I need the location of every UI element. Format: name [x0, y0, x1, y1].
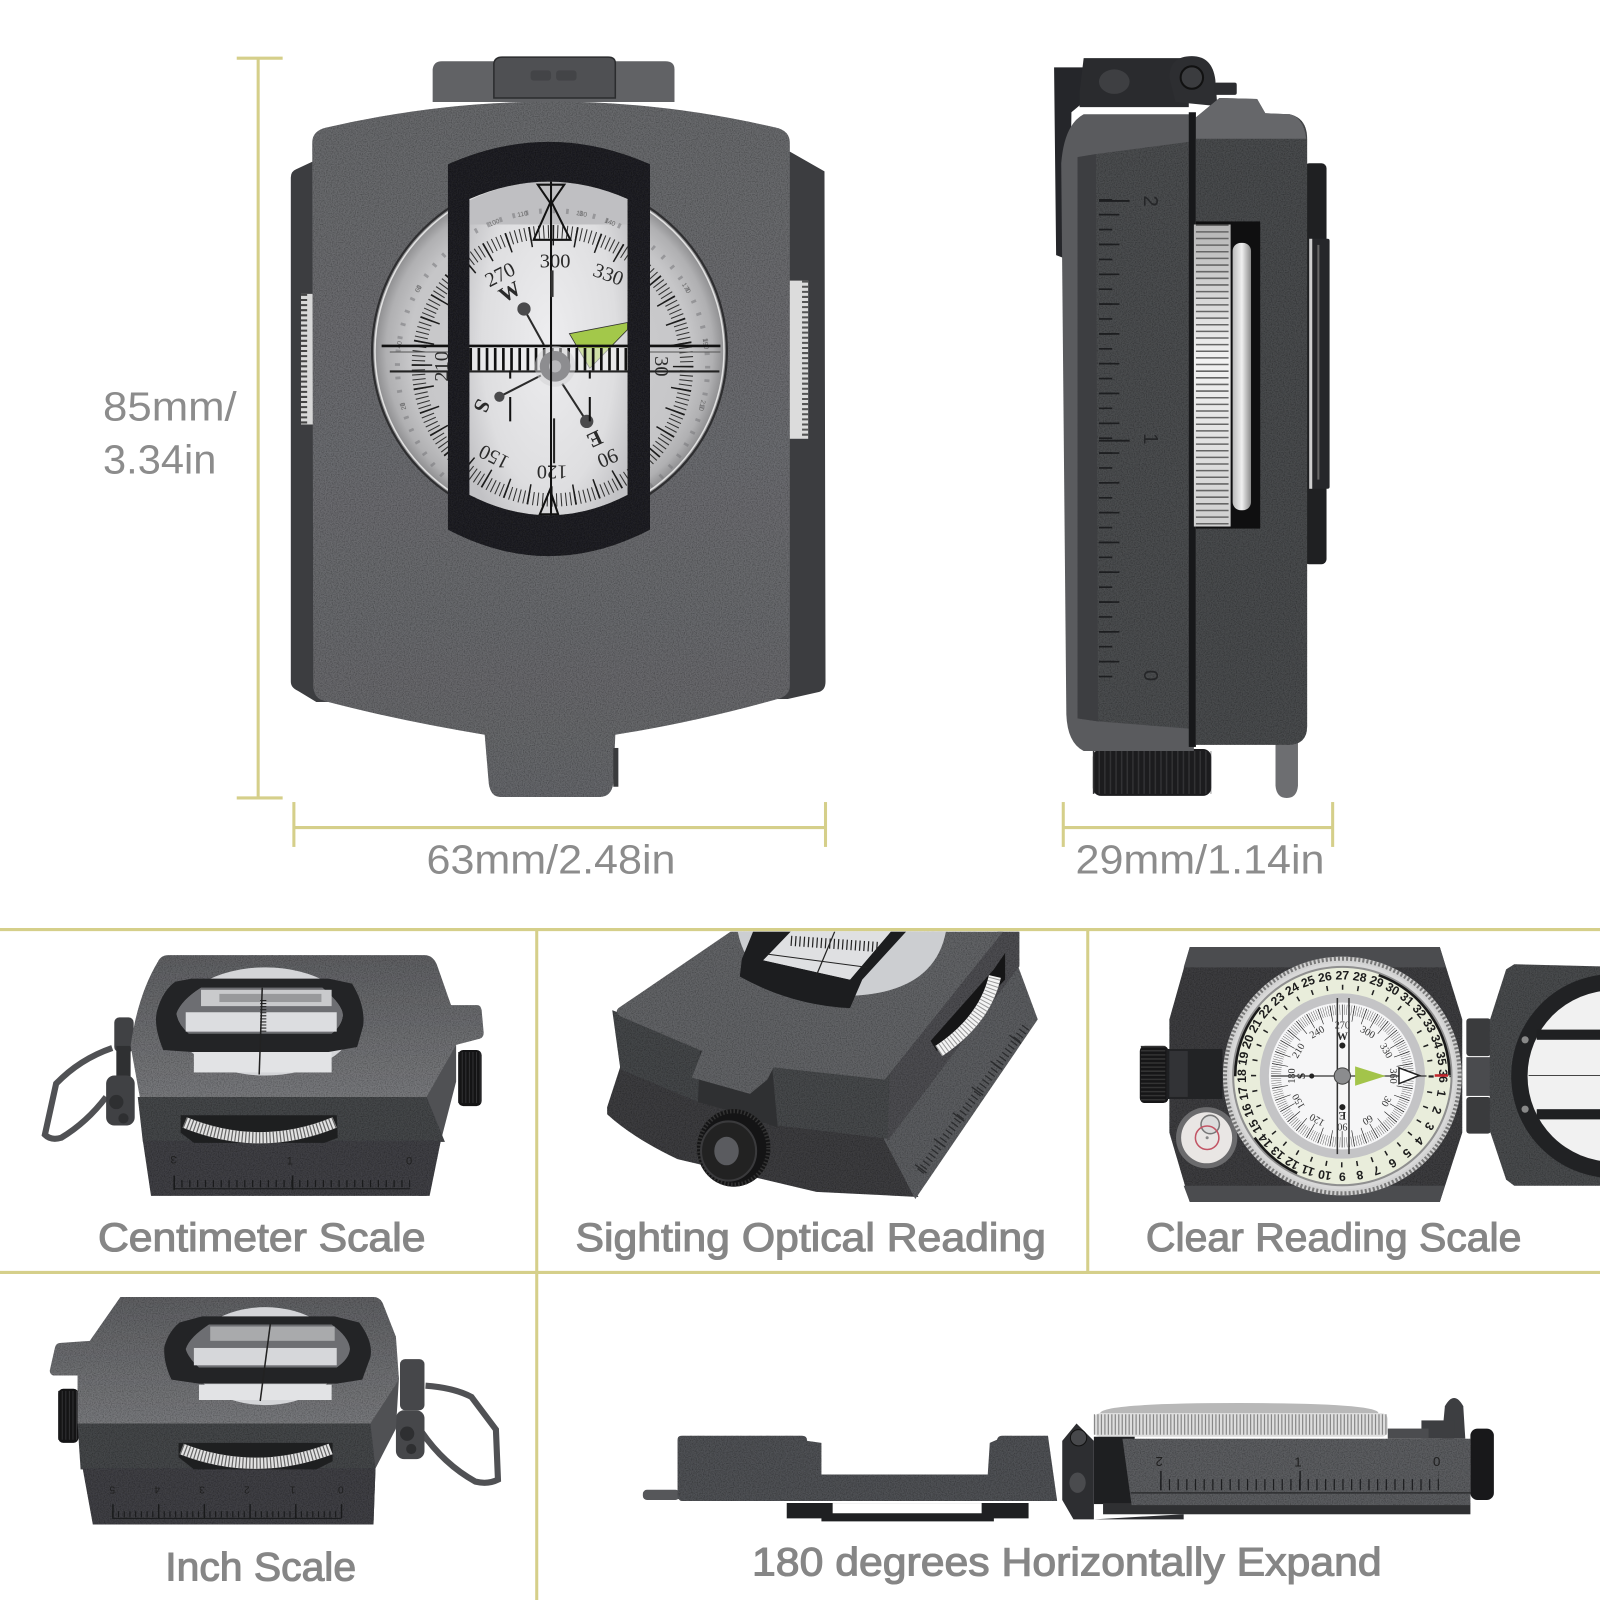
ring numbers: 31 — [1397, 989, 1417, 1009]
glass bands — [194, 1323, 337, 1401]
ruler numbers: 1 — [1139, 433, 1161, 444]
ring numbers: 14 — [1256, 1131, 1275, 1150]
lid — [1490, 964, 1600, 1186]
outer degree numbers: 190 — [701, 338, 709, 350]
cm numbers: 1 — [287, 1155, 293, 1167]
body underside — [1103, 1503, 1470, 1514]
bezel arcs — [1235, 969, 1449, 1183]
center notch — [698, 1051, 778, 1128]
compass: side view — [1054, 56, 1330, 798]
ruler numbers: 0 — [1433, 1454, 1440, 1469]
ring numbers: 6 — [1386, 1155, 1399, 1171]
inner bearings: 30 — [1378, 1094, 1393, 1108]
ring numbers: 15 — [1246, 1117, 1265, 1136]
top face — [617, 932, 1003, 1094]
ruler ticks — [1160, 1481, 1439, 1485]
rear sight — [1388, 1398, 1465, 1439]
bottom knob — [1093, 749, 1211, 796]
lens — [176, 967, 355, 1076]
label: Centimeter Scale — [98, 1216, 426, 1260]
inner bearings: 300 — [1358, 1024, 1377, 1041]
knob — [1470, 1429, 1494, 1500]
label: Clear Reading Scale — [1146, 1216, 1521, 1260]
outer degree numbers: 100 — [488, 218, 501, 228]
dial bearings: 90 — [594, 443, 621, 472]
section dividers — [0, 930, 1600, 1600]
dial ticks — [418, 232, 687, 500]
inch ruler — [112, 1511, 343, 1518]
ruler numbers: 2 — [1139, 195, 1161, 207]
ring numbers: 16 — [1239, 1101, 1257, 1119]
ring numbers: 27 — [1336, 969, 1349, 983]
main face — [312, 102, 790, 797]
hinge — [1062, 1423, 1184, 1519]
ring numbers: 11 — [1299, 1162, 1316, 1179]
ring numbers: 25 — [1299, 973, 1317, 991]
top face — [131, 955, 484, 1097]
lower body — [607, 1066, 918, 1197]
dimension: depth bracket — [1063, 802, 1333, 847]
lid side — [678, 1436, 1057, 1501]
inner bearings: 120 — [1308, 1111, 1327, 1128]
bubble level — [1176, 1107, 1237, 1168]
dimension: height bracket — [237, 58, 283, 798]
label: 180 degrees Horizontally Expand — [752, 1541, 1382, 1585]
inch numbers: 0 — [338, 1484, 344, 1495]
inch numbers: 5 — [109, 1484, 115, 1495]
knurled bezel — [1094, 1413, 1388, 1437]
hinge — [396, 1359, 424, 1459]
ring numbers: 22 — [1256, 1002, 1275, 1021]
inch numbers: 1 — [290, 1484, 296, 1495]
ruler numbers — [1155, 1454, 1440, 1469]
dial bearings: 120 — [537, 460, 567, 482]
ring numbers — [1235, 969, 1450, 1183]
ruler numbers: 1 — [1294, 1454, 1302, 1469]
ring numbers: 2 — [1429, 1105, 1444, 1116]
center gap — [1189, 112, 1196, 747]
ring numbers: 23 — [1268, 989, 1288, 1009]
ruler ticks — [920, 1022, 1028, 1171]
wheel slot — [179, 1443, 333, 1469]
compass: front view — [291, 57, 826, 797]
inner bearings: 270 — [1335, 1021, 1350, 1032]
inner bearings: 240 — [1308, 1024, 1327, 1041]
outer degree numbers: 110 — [517, 210, 529, 219]
rear clip — [1304, 163, 1330, 564]
inner bearings: 330 — [1377, 1042, 1394, 1060]
panel: sighting optical reading — [576, 932, 1046, 1260]
outer degree numbers — [396, 210, 709, 412]
sight notch tab shadow — [613, 748, 618, 787]
hinge — [1466, 1018, 1491, 1134]
wheel — [185, 1122, 335, 1138]
dimension: width bracket — [294, 802, 826, 847]
ring numbers: 18 — [1235, 1069, 1249, 1083]
lens — [738, 932, 946, 996]
ring numbers: 32 — [1410, 1002, 1429, 1021]
sight pin — [1276, 741, 1298, 798]
lens — [191, 1307, 340, 1405]
green pointer — [569, 322, 628, 368]
wheel — [182, 1449, 331, 1463]
eyepiece — [1140, 1046, 1170, 1103]
ruler numbers — [1139, 195, 1161, 681]
dial — [1223, 957, 1462, 1195]
ruler numbers: 0 — [1139, 670, 1161, 681]
inner ticks — [1276, 1010, 1409, 1142]
outer degree numbers: 140 — [603, 217, 617, 228]
ring numbers: 28 — [1352, 969, 1368, 985]
dial bearings: 270 — [482, 259, 519, 292]
inner bearings: 180 — [1287, 1068, 1298, 1084]
scale band — [83, 1468, 376, 1524]
top hinge — [1080, 56, 1237, 107]
needle — [494, 302, 593, 428]
ring numbers: 20 — [1239, 1033, 1257, 1050]
body scale face — [1122, 1439, 1470, 1505]
outer degree ring — [397, 211, 708, 521]
needle and hairlines: S — [1296, 1073, 1308, 1079]
under clip — [787, 1503, 1029, 1521]
scale band — [143, 1141, 441, 1196]
ring numbers: 34 — [1428, 1033, 1446, 1051]
front right block — [772, 1068, 888, 1139]
ring numbers: 8 — [1355, 1167, 1364, 1182]
dial bearings: E — [583, 425, 606, 453]
ring numbers: 5 — [1400, 1145, 1414, 1161]
knob — [58, 1389, 79, 1443]
ring numbers: 21 — [1246, 1016, 1265, 1035]
glass interior — [186, 1324, 350, 1367]
glass bands — [186, 988, 337, 1074]
dial bearings: S — [468, 396, 495, 416]
ring numbers: 26 — [1317, 969, 1333, 985]
inner gray ring — [1260, 993, 1425, 1159]
ruler numbers: 2 — [1155, 1454, 1163, 1469]
dimension: depth label: 29mm/1.14in — [1076, 836, 1324, 882]
wheel slot — [181, 1115, 338, 1143]
bright window area — [469, 173, 629, 541]
lid side — [1054, 67, 1084, 260]
right ruler side — [884, 964, 1038, 1199]
right side — [367, 1378, 399, 1524]
dial bearings: 210 — [431, 351, 453, 382]
dial bearings: 150 — [476, 440, 513, 473]
glass interior — [177, 988, 343, 1034]
wheel — [939, 977, 995, 1051]
ring numbers: 30 — [1383, 980, 1402, 999]
dimension: height label — [103, 383, 237, 482]
panel: centimeter scale — [45, 955, 484, 1260]
needle and hairlines — [1271, 998, 1448, 1154]
right body — [1196, 98, 1307, 745]
carry ring — [421, 1386, 498, 1483]
scale face — [1078, 142, 1189, 729]
front band — [138, 1097, 445, 1142]
inner bearings: 360 — [1387, 1068, 1398, 1084]
lens dial — [371, 182, 728, 516]
ring ticks — [1254, 987, 1431, 1165]
cm ruler — [173, 1183, 410, 1189]
pin — [643, 1490, 680, 1500]
ring numbers: 12 — [1283, 1153, 1302, 1172]
front left block — [612, 1010, 706, 1102]
hinge — [106, 1017, 135, 1126]
focus wheel edges — [301, 281, 808, 439]
left body — [1061, 114, 1194, 751]
ring numbers: 9 — [1339, 1169, 1346, 1183]
needle and hairlines: W — [1337, 1031, 1349, 1043]
lens rim — [371, 207, 728, 495]
outer degree numbers: 170 — [680, 282, 692, 295]
eyepiece — [697, 1109, 770, 1187]
dial bearings — [431, 250, 672, 482]
inch numbers: 4 — [154, 1484, 160, 1495]
dial bearings: 330 — [590, 259, 626, 291]
ring numbers: 19 — [1235, 1050, 1252, 1066]
sight frame — [740, 932, 906, 1008]
back plate — [291, 151, 826, 702]
outer degree numbers: 130 — [575, 210, 588, 219]
lid mirror — [1511, 974, 1600, 1178]
sight scale — [767, 932, 878, 976]
ring numbers: 36 — [1436, 1069, 1450, 1083]
carry ring — [45, 1048, 112, 1139]
compass lens top — [1100, 1403, 1379, 1413]
label: Inch Scale — [165, 1546, 356, 1590]
top face — [50, 1297, 399, 1423]
dial bearings: 300 — [540, 250, 570, 272]
ring numbers: 13 — [1268, 1143, 1288, 1163]
dimension: height label: 3.34in — [103, 436, 216, 482]
ring numbers: 29 — [1368, 973, 1386, 991]
needle and hairlines: E — [1339, 1109, 1346, 1121]
base plate — [1169, 947, 1462, 1202]
window with dial wheel — [1194, 221, 1260, 529]
sight frame — [164, 1316, 371, 1384]
sight glass — [763, 932, 891, 980]
inch numbers: 2 — [244, 1484, 250, 1495]
inner bearings: 210 — [1291, 1042, 1308, 1060]
sight frame — [156, 979, 364, 1052]
inner bearings — [1287, 1021, 1398, 1131]
cm numbers — [170, 1153, 412, 1167]
inner bearings: 150 — [1291, 1092, 1308, 1110]
ring numbers: 4 — [1412, 1133, 1427, 1148]
outer degree numbers: 20 — [399, 401, 408, 411]
outer degree numbers: 210 — [697, 399, 706, 412]
front band — [78, 1423, 376, 1469]
ring numbers: 7 — [1371, 1163, 1382, 1178]
dimension: width label: 63mm/2.48in — [427, 836, 676, 882]
wheel slot — [931, 953, 1005, 1051]
dial bearings: W — [494, 276, 526, 308]
panel: 180 degrees horizontally expand — [643, 1398, 1494, 1585]
dial bearings: 30 — [650, 356, 672, 377]
cm numbers: 3 — [170, 1153, 177, 1165]
knob — [458, 1050, 482, 1106]
panel: inch scale — [50, 1297, 498, 1590]
outer degree numbers: 60 — [414, 284, 424, 294]
ring numbers: 1 — [1434, 1089, 1449, 1098]
eyepiece barrel — [1169, 1049, 1222, 1099]
inner bearings: 90 — [1337, 1120, 1347, 1131]
inch numbers — [109, 1484, 344, 1495]
cm numbers: 0 — [406, 1155, 412, 1167]
ring numbers: 24 — [1283, 979, 1302, 999]
panel: clear reading scale — [1140, 947, 1600, 1260]
right side — [418, 1043, 456, 1196]
ring numbers: 10 — [1317, 1167, 1333, 1183]
reticle and scale — [382, 182, 720, 516]
label: Sighting Optical Reading — [576, 1216, 1046, 1260]
ring numbers: 3 — [1421, 1120, 1437, 1133]
ruler ticks — [1106, 199, 1114, 679]
ring numbers: 33 — [1420, 1016, 1439, 1035]
outer degree numbers: 40 — [396, 340, 404, 349]
upper right side — [878, 932, 1019, 1141]
ring numbers: 35 — [1433, 1051, 1449, 1067]
sight frame — [448, 142, 650, 556]
dimension: height label: 85mm/ — [103, 383, 237, 429]
hinge — [433, 57, 674, 102]
inch numbers: 3 — [199, 1484, 205, 1495]
inner bearings: 60 — [1360, 1112, 1374, 1127]
ring numbers: 17 — [1235, 1085, 1252, 1101]
